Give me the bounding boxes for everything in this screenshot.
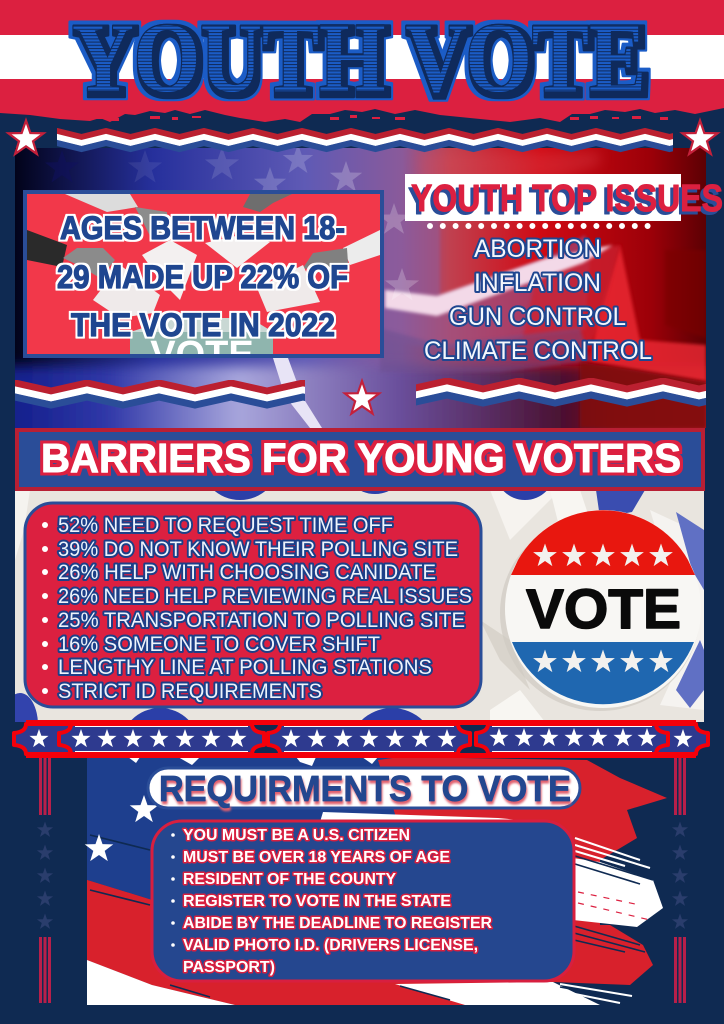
panel: barriers photo background xyxy=(15,491,704,722)
star: top right xyxy=(682,120,718,154)
panel: voting age callout xyxy=(25,192,382,376)
issues list xyxy=(424,235,652,365)
top zigzag ribbon xyxy=(57,128,673,154)
faint side stars xyxy=(37,822,688,929)
callout text xyxy=(57,210,348,343)
requirements text: PASSPORT) xyxy=(183,959,275,976)
requirements text: ABIDE BY THE DEADLINE TO REGISTER xyxy=(183,915,492,932)
side stripes: right xyxy=(674,755,686,1003)
barriers text: 52% NEED TO REQUEST TIME OFF xyxy=(58,514,393,537)
star: top left xyxy=(8,120,44,154)
header stripes xyxy=(0,0,724,170)
panel: barriers list xyxy=(25,503,481,707)
icon: vote button: VOTE xyxy=(526,577,681,640)
barriers text xyxy=(58,514,472,703)
requirement bullets xyxy=(171,833,175,947)
side stripes: left xyxy=(39,755,51,1003)
bullets xyxy=(42,522,48,694)
barriers text: LENGTHY LINE AT POLLING STATIONS xyxy=(58,656,432,679)
issues list: GUN CONTROL xyxy=(449,303,626,331)
callout text: AGES BETWEEN 18- xyxy=(60,210,345,246)
issues list: ABORTION xyxy=(474,235,601,263)
star: centre xyxy=(345,381,379,414)
issues list: CLIMATE CONTROL xyxy=(424,337,652,365)
requirements text: REGISTER TO VOTE IN THE STATE xyxy=(183,893,451,910)
requirements text: YOU MUST BE A U.S. CITIZEN xyxy=(183,827,410,844)
barriers text: STRICT ID REQUIREMENTS xyxy=(58,680,322,703)
requirements text: VALID PHOTO I.D. (DRIVERS LICENSE, xyxy=(183,937,478,954)
photo: hands casting ballots: VOTE xyxy=(150,334,254,376)
right zigzag ribbon xyxy=(416,378,706,410)
dotted divider xyxy=(430,223,648,229)
barriers text: 39% DO NOT KNOW THEIR POLLING SITE xyxy=(58,538,458,561)
left zigzag ribbon xyxy=(15,380,305,412)
panel: requirements brush background xyxy=(85,757,667,1005)
panel: youth top issues xyxy=(405,174,723,365)
callout text: THE VOTE IN 2022 xyxy=(71,307,335,343)
barriers text: 26% HELP WITH CHOOSING CANIDATE xyxy=(58,561,436,584)
icon: vote button xyxy=(500,510,701,711)
barriers text: 26% NEED HELP REVIEWING REAL ISSUES xyxy=(58,585,472,608)
requirements text xyxy=(183,827,492,976)
photo: hands casting ballots xyxy=(27,194,380,354)
callout text: 29 MADE UP 22% OF xyxy=(57,259,348,295)
heading pill: requirements: REQUIRMENTS TO VOTE xyxy=(159,768,571,809)
panel: stats and top issues background xyxy=(15,148,706,428)
barriers text: 16% SOMEONE TO COVER SHIFT xyxy=(58,633,380,656)
heading band: barriers: BARRIERS FOR YOUNG VOTERS xyxy=(41,435,681,481)
title: YOUTH VOTE xyxy=(72,2,646,113)
star banner xyxy=(14,720,708,758)
issues list: INFLATION xyxy=(474,269,601,297)
requirements text: MUST BE OVER 18 YEARS OF AGE xyxy=(183,849,450,866)
requirements text: RESIDENT OF THE COUNTY xyxy=(183,871,396,888)
panel: requirements list xyxy=(152,821,574,981)
barriers text: 25% TRANSPORTATION TO POLLING SITE xyxy=(58,609,465,632)
